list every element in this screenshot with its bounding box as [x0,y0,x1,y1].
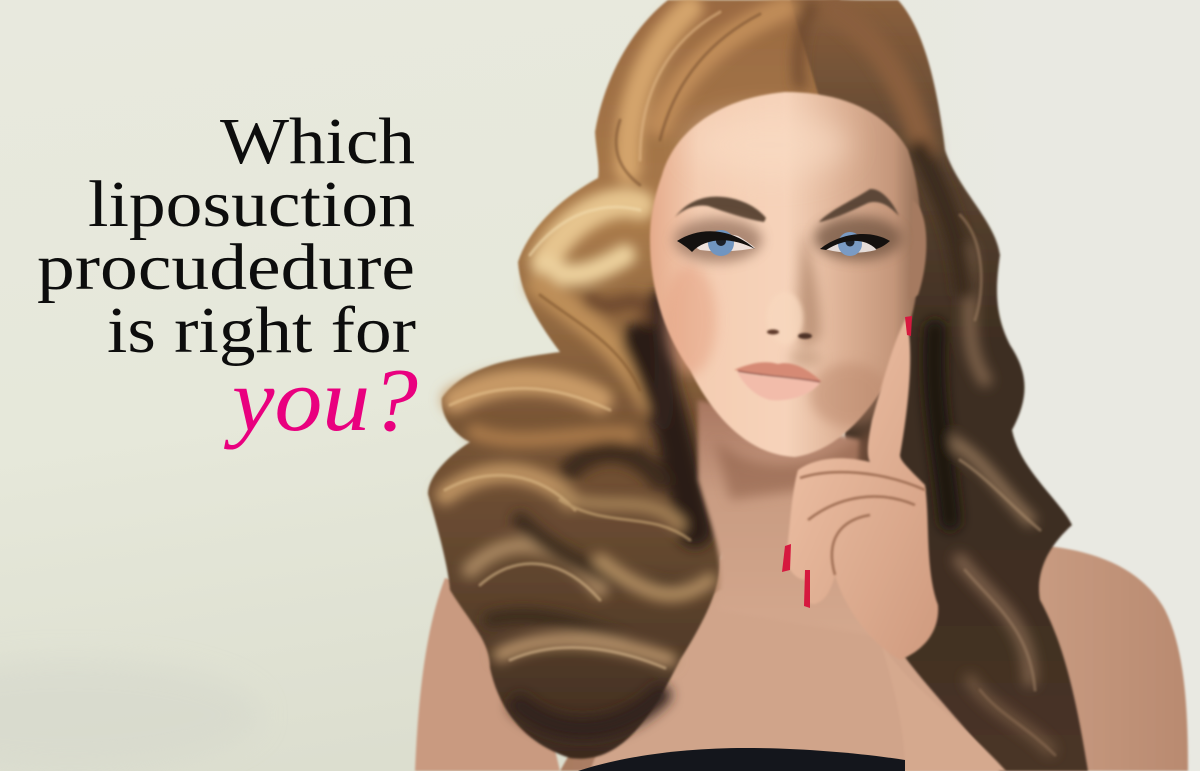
line 3: procudedure [37,231,415,304]
headline [37,105,418,450]
cheek blush [664,265,716,375]
face [650,92,921,457]
neck [694,399,862,602]
shoulder and chest [560,545,1188,771]
eyebrow: left [675,197,766,222]
lips [734,362,822,400]
photo: woman with wavy hair [415,0,1188,771]
eye: left [674,218,762,262]
hair strands [445,12,1055,755]
dress [578,748,905,771]
line 4: is right for [107,294,416,367]
line 1: Which [220,105,415,178]
philtrum shadow [789,349,821,367]
finger creases [800,472,925,575]
under-lip shade [810,363,890,427]
shoulder: left [415,578,560,771]
nails [782,316,912,608]
eyebrow: right [819,189,899,222]
hair: right mass [790,0,1088,771]
nose [767,292,812,344]
hand and arm [786,318,1006,771]
eye: right [814,216,902,260]
forehead light [690,113,850,177]
line 5: pink emphasis: you? [223,351,418,450]
neck shadow [716,425,870,503]
line 2: liposuction [88,168,415,241]
nose shadow [798,230,820,350]
ear shadow [914,203,928,298]
hair highlights: golden waves [445,6,1050,750]
hair: back mass, left and top [428,0,840,759]
